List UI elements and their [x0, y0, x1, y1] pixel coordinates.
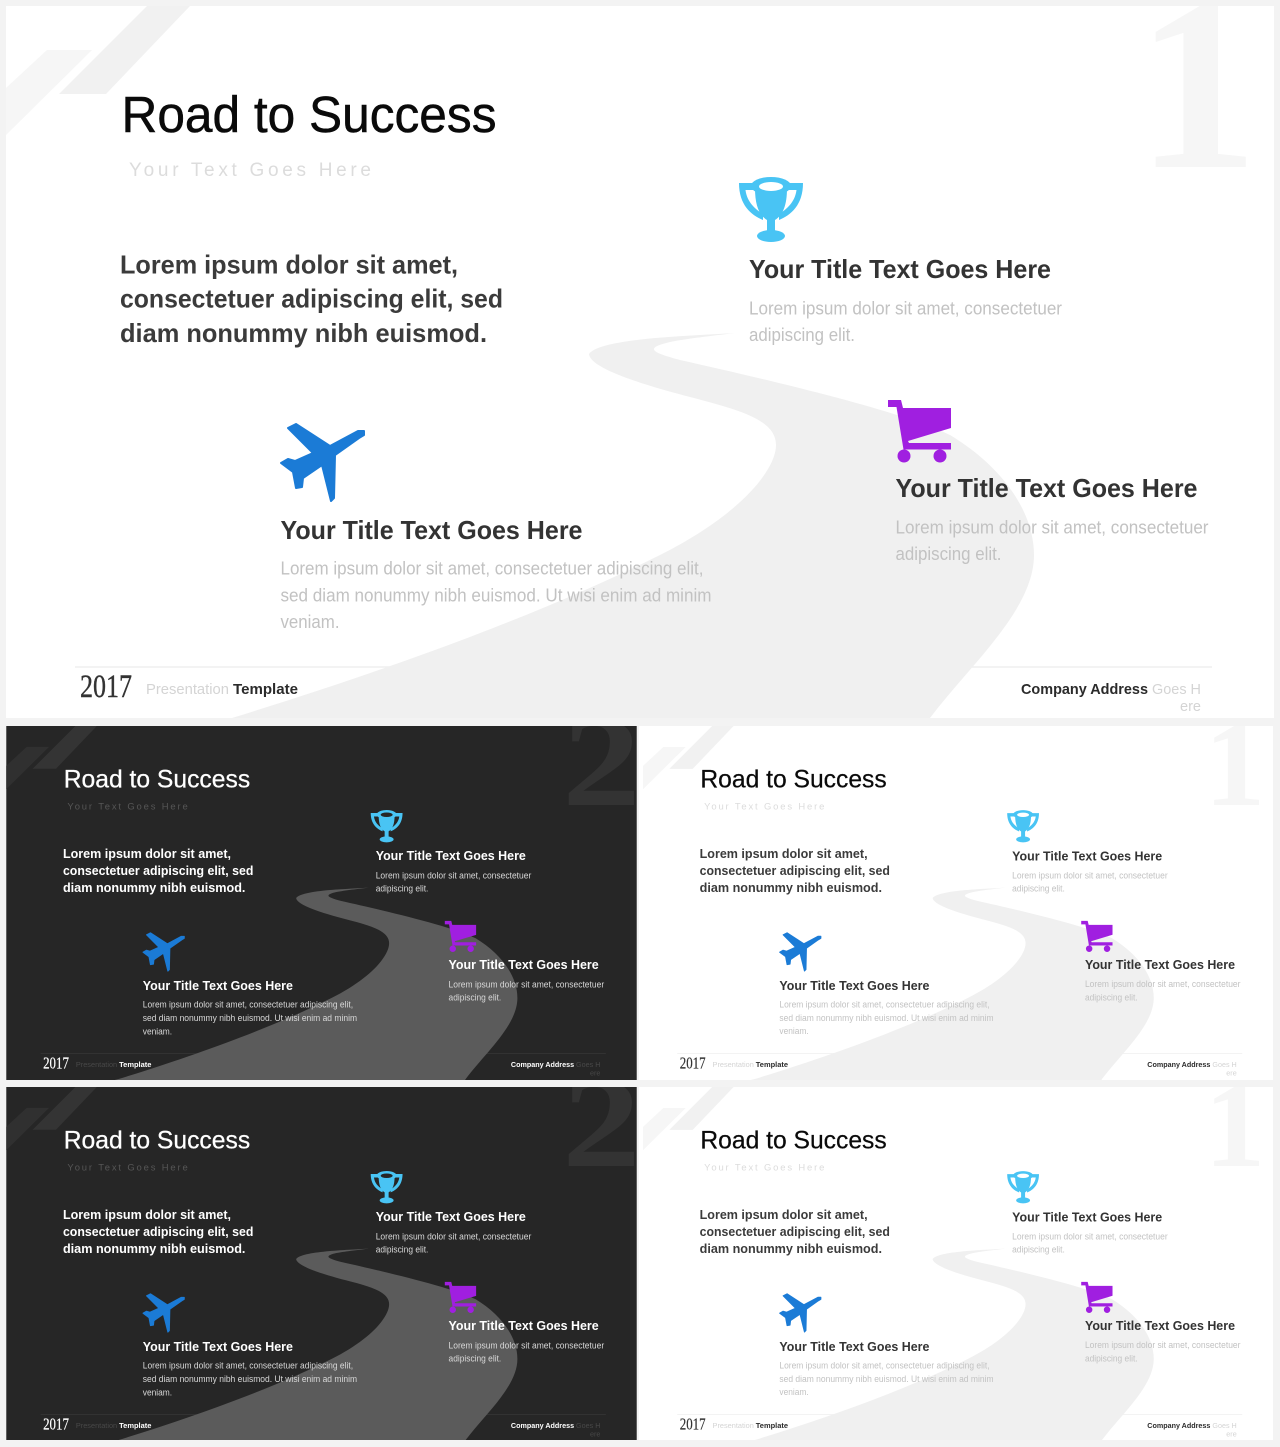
icon: trophy: [371, 1171, 403, 1203]
item: trophy text: [1012, 848, 1168, 894]
intro text: Lorem ipsum dolor sit amet,: [700, 1207, 868, 1222]
item: airplane text: Your Title Text Goes Here: [280, 515, 582, 545]
icon: shopping cart: [1081, 1282, 1113, 1313]
footer left: 2017: [43, 1054, 69, 1073]
intro text: Lorem ipsum dolor sit amet,: [120, 250, 458, 280]
white backing for right column slides: [639, 726, 1273, 1441]
footer right: Company Address: [1147, 1421, 1210, 1430]
large slide number: 2: [562, 1051, 641, 1194]
item: airplane text: [779, 978, 994, 1036]
intro text: diam nonummy nibh euismod.: [63, 1241, 245, 1256]
intro text: consectetuer adipiscing elit, sed: [700, 863, 890, 878]
small light slide, row 2: [643, 1059, 1265, 1440]
footer right: ere: [1226, 1068, 1237, 1077]
intro text: Lorem ipsum dolor sit amet,: [700, 846, 868, 861]
item: trophy text: Lorem ipsum dolor sit amet, consectetuer: [1012, 870, 1168, 880]
footer right: [511, 1060, 600, 1078]
intro text: [63, 1207, 253, 1256]
item: airplane text: sed diam nonummy nibh euismod. Ut wisi enim ad minim: [143, 1374, 357, 1384]
subtitle: Your Text Goes Here: [129, 160, 371, 181]
item: cart text: [449, 957, 604, 1002]
intro text: diam nonummy nibh euismod.: [700, 880, 882, 895]
item: cart text: Your Title Text Goes Here: [1085, 1318, 1235, 1333]
item: trophy text: [376, 1209, 531, 1255]
large slide number: 1: [1204, 1059, 1265, 1193]
item: trophy text: Your Title Text Goes Here: [749, 254, 1051, 284]
icon: airplane: [780, 1294, 821, 1332]
item: trophy text: adipiscing elit.: [376, 1245, 428, 1255]
footer left: Presentation: [713, 1421, 754, 1430]
footer right: Goes H: [1152, 681, 1201, 698]
footer left: Presentation: [76, 1060, 117, 1069]
intro text: consectetuer adipiscing elit, sed: [700, 1224, 890, 1239]
road: [739, 888, 1154, 1083]
item: airplane text: veniam.: [143, 1387, 172, 1397]
title: Road to Success: [64, 766, 250, 794]
item: cart text: adipiscing elit.: [1085, 992, 1138, 1002]
item: trophy text: Your Title Text Goes Here: [376, 1209, 526, 1224]
item: airplane text: Your Title Text Goes Here: [143, 1339, 293, 1354]
item: cart text: Lorem ipsum dolor sit amet, consectetuer: [896, 516, 1208, 538]
footer left: 2017: [43, 1415, 69, 1434]
icon: shopping cart: [888, 400, 951, 462]
item: trophy text: Lorem ipsum dolor sit amet, consectetuer: [376, 1231, 531, 1241]
footer right: Goes H: [576, 1060, 600, 1069]
item: airplane text: Your Title Text Goes Here: [143, 978, 293, 993]
footer left: [680, 1053, 788, 1072]
item: airplane text: Lorem ipsum dolor sit amet, consectetuer adipiscing elit,: [280, 558, 704, 578]
item: cart text: [1085, 1318, 1240, 1363]
intro text: [700, 1207, 890, 1256]
footer left: Template: [119, 1421, 151, 1430]
icon: shopping cart: [445, 921, 476, 952]
item: airplane text: sed diam nonummy nibh euismod. Ut wisi enim ad minim: [280, 584, 712, 606]
item: airplane text: veniam.: [143, 1026, 172, 1036]
item: airplane text: Your Title Text Goes Here: [779, 978, 929, 993]
footer left: Template: [119, 1060, 151, 1069]
item: airplane text: [143, 1339, 357, 1397]
icon: trophy: [371, 810, 403, 842]
small light slide, row 1: [643, 698, 1265, 1080]
small dark slide, row 2: [6, 1051, 641, 1440]
footer right: ere: [590, 1430, 600, 1439]
footer left: 2017: [680, 1414, 706, 1433]
footer right: ere: [1180, 698, 1201, 715]
footer right: ere: [590, 1069, 600, 1078]
intro text: Lorem ipsum dolor sit amet,: [63, 846, 231, 861]
item: trophy text: Lorem ipsum dolor sit amet, consectetuer: [376, 870, 531, 880]
footer left: Template: [233, 681, 298, 698]
item: airplane text: sed diam nonummy nibh euismod. Ut wisi enim ad minim: [143, 1013, 357, 1023]
footer right: [1021, 681, 1201, 715]
intro text: consectetuer adipiscing elit, sed: [63, 863, 253, 878]
footer left: Presentation: [713, 1060, 754, 1069]
item: airplane text: Your Title Text Goes Here: [779, 1339, 929, 1354]
footer right: Company Address: [1147, 1060, 1210, 1069]
large slide number: 1: [1204, 698, 1265, 832]
subtitle: Your Text Goes Here: [67, 802, 188, 813]
item: cart text: adipiscing elit.: [449, 992, 501, 1002]
road: [200, 333, 1034, 726]
icon: trophy: [1007, 1171, 1039, 1203]
road: [739, 1249, 1154, 1444]
item: trophy text: [749, 254, 1062, 345]
road: [103, 1249, 517, 1444]
footer left: 2017: [80, 669, 132, 705]
item: trophy text: adipiscing elit.: [749, 324, 855, 345]
title: Road to Success: [700, 1127, 887, 1155]
subtitle: Your Text Goes Here: [67, 1163, 188, 1174]
item: trophy text: [1012, 1209, 1168, 1255]
footer right: [511, 1421, 600, 1439]
item: airplane text: sed diam nonummy nibh euismod. Ut wisi enim ad minim: [779, 1013, 994, 1023]
item: cart text: Lorem ipsum dolor sit amet, consectetuer: [1085, 1340, 1240, 1350]
item: trophy text: adipiscing elit.: [1012, 1245, 1065, 1255]
item: cart text: Lorem ipsum dolor sit amet, consectetuer: [449, 1340, 604, 1350]
footer right: Company Address: [511, 1421, 574, 1430]
road: [103, 888, 517, 1083]
title: Road to Success: [64, 1127, 250, 1155]
item: trophy text: adipiscing elit.: [1012, 884, 1065, 894]
footer left: Presentation: [146, 681, 229, 698]
footer right: Goes H: [576, 1421, 600, 1430]
item: airplane text: Lorem ipsum dolor sit amet, consectetuer adipiscing elit,: [779, 1000, 990, 1010]
subtitle: Your Text Goes Here: [704, 1163, 824, 1174]
icon: airplane: [281, 424, 364, 501]
item: trophy text: Your Title Text Goes Here: [376, 848, 526, 863]
icon: trophy: [739, 177, 803, 242]
footer left: Template: [756, 1421, 788, 1430]
icon: airplane: [143, 1294, 184, 1332]
icon: trophy: [1007, 810, 1039, 842]
item: airplane text: [779, 1339, 994, 1397]
item: trophy text: Lorem ipsum dolor sit amet, consectetuer: [749, 298, 1062, 318]
footer right: Goes H: [1212, 1060, 1237, 1069]
footer left: 2017: [680, 1053, 706, 1072]
item: cart text: Your Title Text Goes Here: [1085, 957, 1235, 972]
large slide number: 2: [562, 690, 641, 833]
intro text: Lorem ipsum dolor sit amet,: [63, 1207, 231, 1222]
large light slide: [6, 0, 1274, 718]
item: cart text: [896, 473, 1208, 564]
footer left: [80, 669, 298, 705]
item: cart text: [449, 1318, 604, 1363]
footer right: [1147, 1060, 1237, 1077]
item: cart text: Your Title Text Goes Here: [449, 957, 599, 972]
intro text: [120, 250, 503, 348]
intro text: diam nonummy nibh euismod.: [120, 318, 487, 348]
icon: airplane: [143, 933, 184, 971]
footer left: [43, 1415, 151, 1434]
small dark slide, row 1: [6, 690, 641, 1080]
icon: airplane: [780, 933, 821, 971]
subtitle: Your Text Goes Here: [704, 802, 824, 813]
footer right: Company Address: [1021, 681, 1148, 698]
footer right: ere: [1226, 1429, 1237, 1438]
item: airplane text: Lorem ipsum dolor sit amet, consectetuer adipiscing elit,: [779, 1361, 990, 1371]
item: airplane text: sed diam nonummy nibh euismod. Ut wisi enim ad minim: [779, 1374, 994, 1384]
item: trophy text: adipiscing elit.: [376, 884, 428, 894]
item: airplane text: veniam.: [779, 1026, 809, 1036]
item: airplane text: veniam.: [280, 611, 340, 632]
title: Road to Success: [700, 766, 887, 794]
intro text: diam nonummy nibh euismod.: [700, 1241, 882, 1256]
item: cart text: adipiscing elit.: [449, 1353, 501, 1363]
item: airplane text: veniam.: [779, 1387, 809, 1397]
title: Road to Success: [122, 86, 496, 143]
intro text: consectetuer adipiscing elit, sed: [120, 284, 503, 314]
item: cart text: Your Title Text Goes Here: [449, 1318, 599, 1333]
item: trophy text: Your Title Text Goes Here: [1012, 848, 1162, 863]
footer right: [1147, 1421, 1237, 1438]
item: cart text: Your Title Text Goes Here: [896, 473, 1198, 503]
item: airplane text: [143, 978, 357, 1036]
item: trophy text: Your Title Text Goes Here: [1012, 1209, 1162, 1224]
item: cart text: adipiscing elit.: [1085, 1353, 1138, 1363]
intro text: [700, 846, 890, 895]
footer left: Presentation: [76, 1421, 117, 1430]
item: trophy text: [376, 848, 531, 894]
intro text: diam nonummy nibh euismod.: [63, 880, 245, 895]
item: cart text: [1085, 957, 1240, 1002]
footer right: Company Address: [511, 1060, 574, 1069]
icon: shopping cart: [445, 1282, 476, 1313]
icon: shopping cart: [1081, 921, 1113, 952]
footer left: [43, 1054, 151, 1073]
item: airplane text: Lorem ipsum dolor sit amet, consectetuer adipiscing elit,: [143, 1361, 353, 1371]
item: cart text: Lorem ipsum dolor sit amet, consectetuer: [449, 979, 604, 989]
item: cart text: Lorem ipsum dolor sit amet, consectetuer: [1085, 979, 1240, 989]
item: airplane text: [280, 515, 712, 632]
intro text: [63, 846, 253, 895]
footer left: Template: [756, 1060, 788, 1069]
item: trophy text: Lorem ipsum dolor sit amet, consectetuer: [1012, 1231, 1168, 1241]
footer left: [680, 1414, 788, 1433]
item: airplane text: Lorem ipsum dolor sit amet, consectetuer adipiscing elit,: [143, 1000, 353, 1010]
item: cart text: adipiscing elit.: [896, 543, 1002, 564]
intro text: consectetuer adipiscing elit, sed: [63, 1224, 253, 1239]
footer right: Goes H: [1212, 1421, 1237, 1430]
